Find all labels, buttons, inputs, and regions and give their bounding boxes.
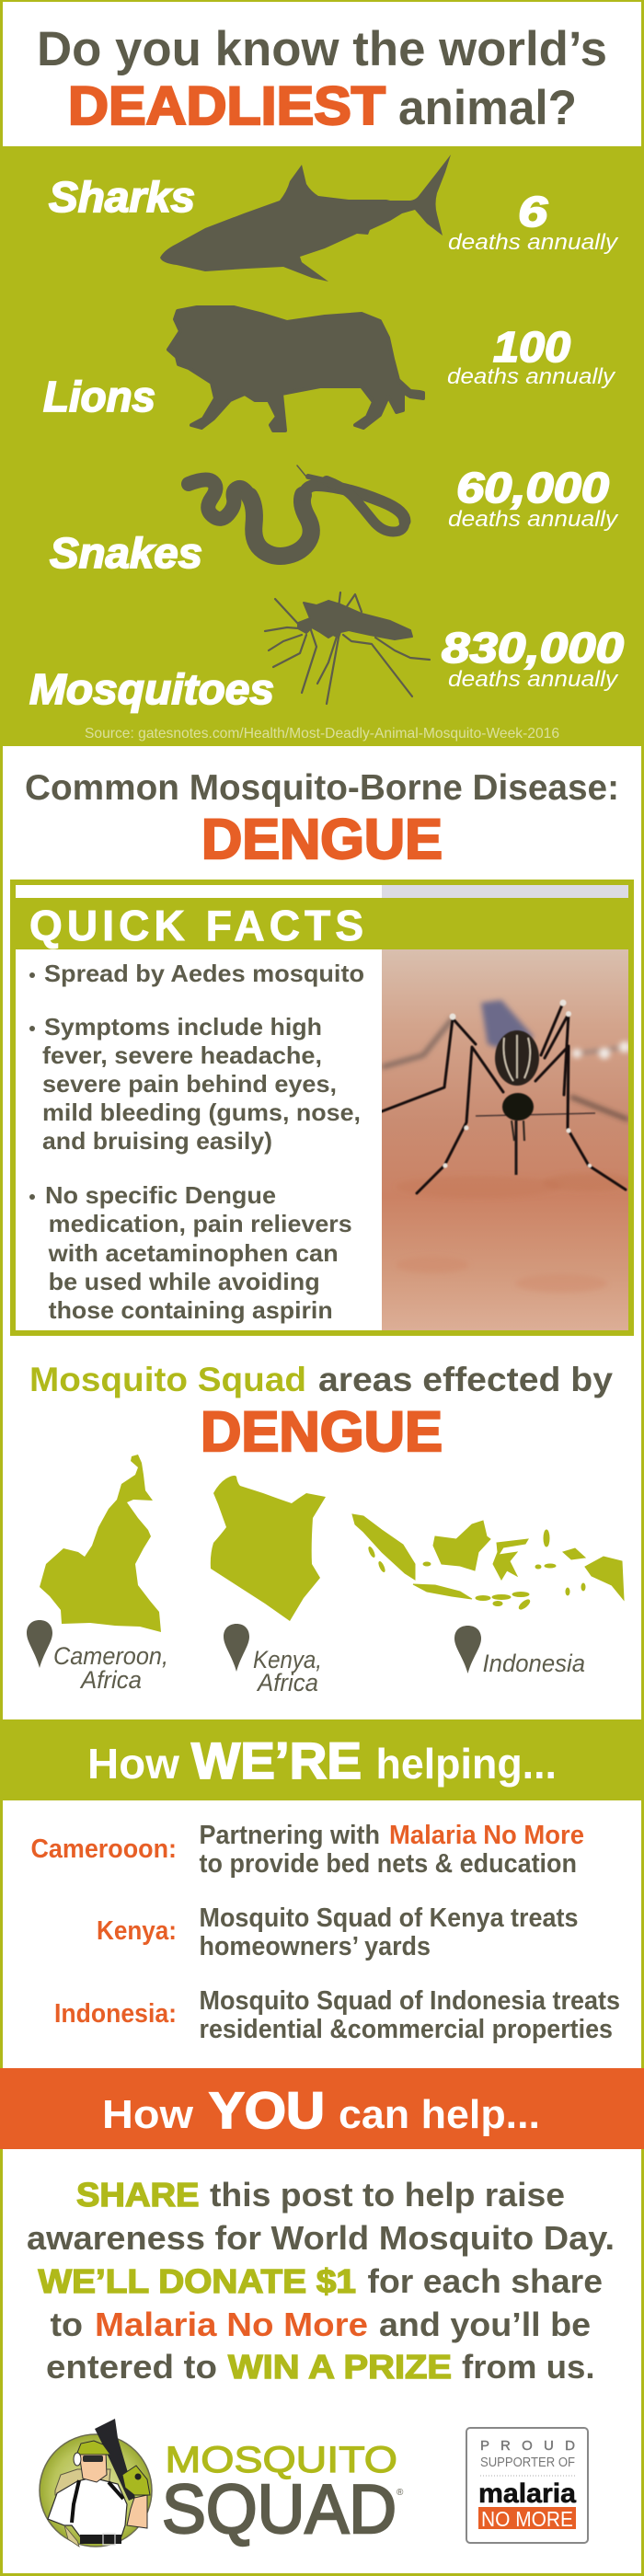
heading: areas affected: Mosquito Squad bbox=[29, 1361, 306, 1398]
map: kenya bbox=[211, 1476, 326, 1696]
stat: snakes deaths bbox=[448, 464, 619, 532]
banner: how you can help: YOU bbox=[209, 2081, 325, 2139]
wordmark: SQUAD bbox=[162, 2470, 397, 2547]
fact: medication bbox=[29, 1181, 352, 1324]
row: cameroon help bbox=[31, 1821, 584, 1879]
banner: how we're helping: How bbox=[87, 1740, 179, 1788]
fact: symptoms: severe pain behind eyes, bbox=[42, 1070, 337, 1098]
title: Do you know the world’s bbox=[37, 22, 607, 76]
call to action text: to bbox=[50, 2306, 83, 2343]
fact: medication: with acetaminophen can bbox=[48, 1239, 339, 1267]
badge: proud supporter of malaria no more: malaria bbox=[478, 2478, 576, 2509]
stat: lions deaths bbox=[447, 323, 616, 389]
row: cameroon help: Camerooon: bbox=[31, 1834, 177, 1864]
heading: areas affected: areas effected by bbox=[318, 1361, 613, 1398]
map: indonesia bbox=[352, 1514, 624, 1677]
banner: how you can help: How bbox=[102, 2092, 194, 2137]
row: cameroon help: to provide bed nets & education bbox=[199, 1849, 577, 1879]
row: kenya help: Kenya: bbox=[97, 1916, 177, 1946]
call to action text: for each share bbox=[368, 2262, 603, 2300]
icon: lion silhouette bbox=[168, 307, 423, 431]
call to action text: SHARE bbox=[76, 2176, 199, 2214]
panel: quick facts bbox=[13, 882, 635, 1333]
call to action text: awareness for World Mosquito Day. bbox=[27, 2219, 615, 2257]
wordmark: ® bbox=[397, 2488, 404, 2498]
panel: deadliest animals comparison bbox=[0, 146, 644, 746]
heading: areas affected: DENGUE bbox=[201, 1400, 443, 1463]
label: mosquitoes: Mosquitoes bbox=[29, 665, 274, 713]
row: kenya help: Mosquito Squad of Kenya treats bbox=[199, 1903, 578, 1933]
stat: snakes deaths: 60,000 bbox=[456, 464, 609, 512]
title: DEADLIEST bbox=[68, 76, 385, 136]
title: animal? bbox=[398, 81, 577, 135]
heading: areas affected bbox=[29, 1361, 613, 1463]
icon: shark silhouette bbox=[160, 155, 451, 282]
fact: medication: be used while avoiding bbox=[49, 1268, 320, 1295]
map: cameroon bbox=[27, 1455, 168, 1694]
call to action text: WE’LL DONATE $1 bbox=[39, 2262, 356, 2300]
icon: map pin bbox=[454, 1626, 481, 1673]
row: kenya help bbox=[97, 1903, 578, 1961]
call to action text: WIN A PRIZE bbox=[228, 2348, 452, 2386]
label: cameroon: Africa bbox=[79, 1666, 142, 1694]
label: sharks: Sharks bbox=[49, 173, 195, 221]
icon: snake silhouette bbox=[189, 466, 405, 557]
stat: snakes deaths: deaths annually bbox=[448, 507, 619, 532]
badge: proud supporter of malaria no more: NO MORE bbox=[481, 2507, 573, 2531]
row: indonesia help: Indonesia: bbox=[54, 1999, 177, 2029]
call to action text: Malaria No More bbox=[95, 2306, 368, 2343]
fact: symptoms bbox=[29, 1013, 361, 1155]
label: kenya: Africa bbox=[256, 1669, 318, 1696]
banner: how we're helping: helping... bbox=[375, 1740, 557, 1788]
fact: symptoms: mild bleeding (gums, nose, bbox=[42, 1098, 361, 1126]
row: cameroon help: Malaria No More bbox=[389, 1821, 584, 1850]
heading: common mosquito-borne disease bbox=[25, 768, 619, 870]
photo: aedes mosquito on skin bbox=[382, 949, 635, 1330]
call to action text: and you’ll be bbox=[379, 2306, 591, 2343]
stat: sharks deaths: deaths annually bbox=[448, 230, 619, 255]
logo: mosquito squad bbox=[40, 2419, 404, 2547]
label: indonesia: Indonesia bbox=[482, 1650, 585, 1677]
heading: common mosquito-borne disease: Common Mosquito-Borne Disease: bbox=[25, 768, 619, 808]
banner: how you can help: can help... bbox=[339, 2092, 540, 2137]
title bbox=[37, 22, 607, 136]
icon: map pin bbox=[224, 1624, 249, 1672]
stat: mosquito deaths: deaths annually bbox=[448, 667, 619, 692]
stat: lions deaths: 100 bbox=[493, 323, 570, 371]
label: kenya bbox=[253, 1646, 322, 1696]
heading: common mosquito-borne disease: DENGUE bbox=[201, 808, 443, 870]
stat: lions deaths: deaths annually bbox=[447, 364, 616, 389]
badge: proud supporter of malaria no more: P R O U D bbox=[480, 2438, 575, 2454]
stat: mosquito deaths bbox=[442, 624, 624, 692]
badge: proud supporter of malaria no more bbox=[466, 2428, 588, 2543]
quick facts banner bbox=[16, 898, 628, 949]
fact: symptoms: fever, severe headache, bbox=[42, 1041, 322, 1069]
row: kenya help: homeowners’ yards bbox=[199, 1932, 431, 1961]
row: indonesia help bbox=[54, 1986, 620, 2044]
icon: mascot bbox=[40, 2419, 152, 2547]
stat: mosquito deaths: 830,000 bbox=[442, 624, 624, 672]
fact: medication: those containing aspirin bbox=[49, 1296, 333, 1324]
label: kenya: Kenya, bbox=[253, 1646, 322, 1673]
row: indonesia help: Mosquito Squad of Indonesia treats bbox=[199, 1986, 620, 2016]
banner: how you can help bbox=[0, 2068, 644, 2149]
icon: mosquito silhouette bbox=[265, 592, 430, 704]
fact: symptoms: Symptoms include high bbox=[44, 1013, 322, 1041]
row: cameroon help: Partnering with bbox=[199, 1821, 380, 1850]
wordmark: MOSQUITO bbox=[166, 2440, 397, 2480]
banner: how we're helping bbox=[0, 1719, 644, 1800]
fact: medication: No specific Dengue bbox=[45, 1181, 276, 1209]
quick facts banner: QUICK FACTS bbox=[29, 902, 363, 949]
label: cameroon: Cameroon, bbox=[53, 1642, 168, 1670]
icon: map pin bbox=[27, 1620, 52, 1668]
banner: how we're helping: WE’RE bbox=[191, 1731, 362, 1789]
label: lions: Lions bbox=[43, 373, 155, 420]
fact: spread by: Spread by Aedes mosquito bbox=[44, 960, 364, 987]
source note: Source: gatesnotes.com/Health/Most-Deadly-Animal-Mosquito-Week-2016 bbox=[85, 726, 559, 742]
row: indonesia help: residential &commercial properties bbox=[199, 2015, 613, 2044]
fact: medication: medication, pain relievers bbox=[49, 1210, 352, 1237]
call to action text bbox=[27, 2176, 615, 2386]
call to action text: from us. bbox=[462, 2348, 594, 2386]
badge: proud supporter of malaria no more: SUPPORTER OF bbox=[480, 2455, 575, 2470]
call to action text: entered to bbox=[46, 2348, 217, 2386]
stat: sharks deaths bbox=[448, 188, 619, 255]
label: cameroon bbox=[53, 1642, 168, 1694]
fact: symptoms: and bruising easily) bbox=[42, 1127, 272, 1155]
stat: sharks deaths: 6 bbox=[518, 188, 548, 236]
label: snakes: Snakes bbox=[50, 529, 202, 577]
call to action text: this post to help raise bbox=[210, 2176, 565, 2214]
